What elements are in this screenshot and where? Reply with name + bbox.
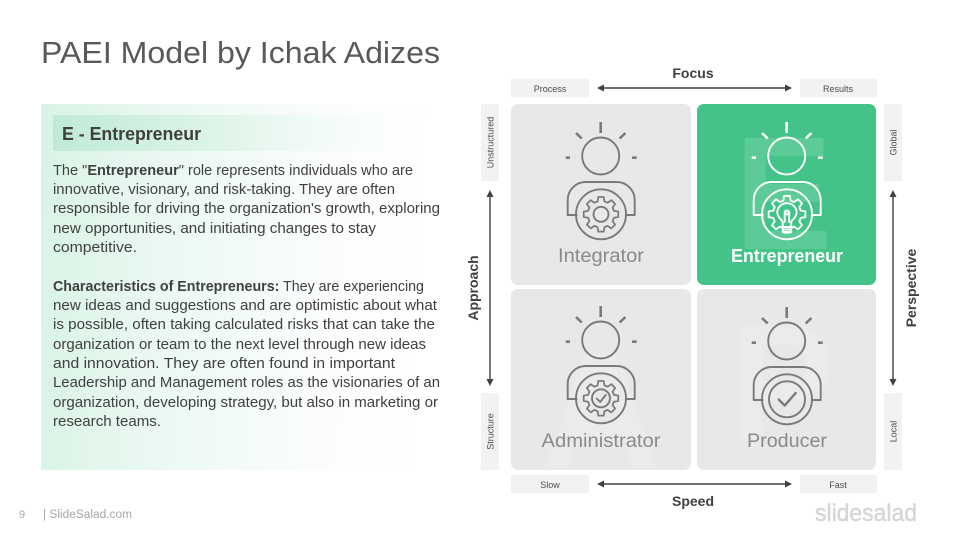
card: entrepreneur (697, 104, 876, 285)
card: integrator (511, 104, 691, 285)
text block: role description: responsible for driving the organization's growth, exploring (53, 201, 440, 217)
text block: characteristics: and innovation. They are often found in important (53, 356, 395, 372)
heading band (53, 115, 440, 151)
watermark letter P: P (729, 291, 835, 475)
axis: focus (511, 65, 877, 97)
card: producer (697, 289, 876, 475)
text block: characteristics: is possible, often taking calculated risks that can take the (53, 317, 435, 333)
title: PAEI Model by Ichak Adizes (41, 35, 440, 70)
axis: perspective: Perspective (903, 248, 919, 327)
text block: role description: The "Entrepreneur" role represents individuals who are (53, 163, 413, 179)
logo: slidesalad: slidesalad (815, 500, 917, 527)
text block: role description: competitive. (53, 240, 137, 256)
text block: role description: innovative, visionary, and risk-taking. They are often (53, 182, 395, 198)
axis: speed: Speed (672, 493, 714, 509)
axis: approach: Approach (465, 255, 481, 321)
axis: speed: Slow (540, 480, 560, 490)
icon: person with gear (566, 122, 637, 239)
axis: perspective: Local (888, 421, 898, 442)
icon: person with check badge (752, 307, 823, 424)
text block: characteristics: new ideas and suggestions and are optimistic about what (53, 298, 437, 314)
text block: characteristics: research teams. (53, 414, 161, 430)
text block: characteristics: organization or team to the next level through new ideas (53, 337, 426, 353)
watermark letter E: E (735, 104, 832, 284)
text block: characteristics: Characteristics of Entrepreneurs: They are experiencing (53, 279, 424, 295)
card: producer: Producer (747, 431, 828, 452)
icon: lightbulb (777, 203, 797, 232)
axis: focus: Results (823, 84, 854, 94)
axis: focus: Focus (672, 65, 714, 81)
heading band: E - Entrepreneur (62, 124, 201, 144)
axis: perspective: Global (888, 129, 898, 156)
axis: focus: Process (534, 84, 567, 94)
watermark letter A: A (540, 317, 662, 507)
icon: person with lightbulb gear (752, 122, 823, 239)
text block: role description: new opportunities, and initiating changes to stay (53, 221, 377, 237)
icon: person with gear and check (566, 306, 637, 423)
footer source: | SlideSalad.com (43, 509, 132, 521)
axis: speed: Fast (829, 480, 847, 490)
axis: approach (465, 104, 499, 470)
axis: perspective (884, 104, 919, 470)
axis: approach: Structure (486, 413, 496, 450)
text block: role description (53, 163, 440, 256)
page number: 9 (19, 509, 25, 521)
card: entrepreneur: Entrepreneur (731, 245, 843, 266)
panel: entrepreneur description (41, 104, 441, 470)
card: administrator (511, 289, 691, 507)
card: administrator: Administrator (542, 431, 661, 452)
text block: characteristics: organization, developing strategy, but also in marketing or (53, 395, 438, 411)
axis: approach: Unstructured (486, 117, 496, 168)
text block: characteristics: Leadership and Management roles as the visionaries of an (53, 375, 440, 391)
axis: speed (511, 475, 877, 509)
card: integrator: Integrator (558, 246, 645, 267)
text block: characteristics (53, 279, 440, 430)
